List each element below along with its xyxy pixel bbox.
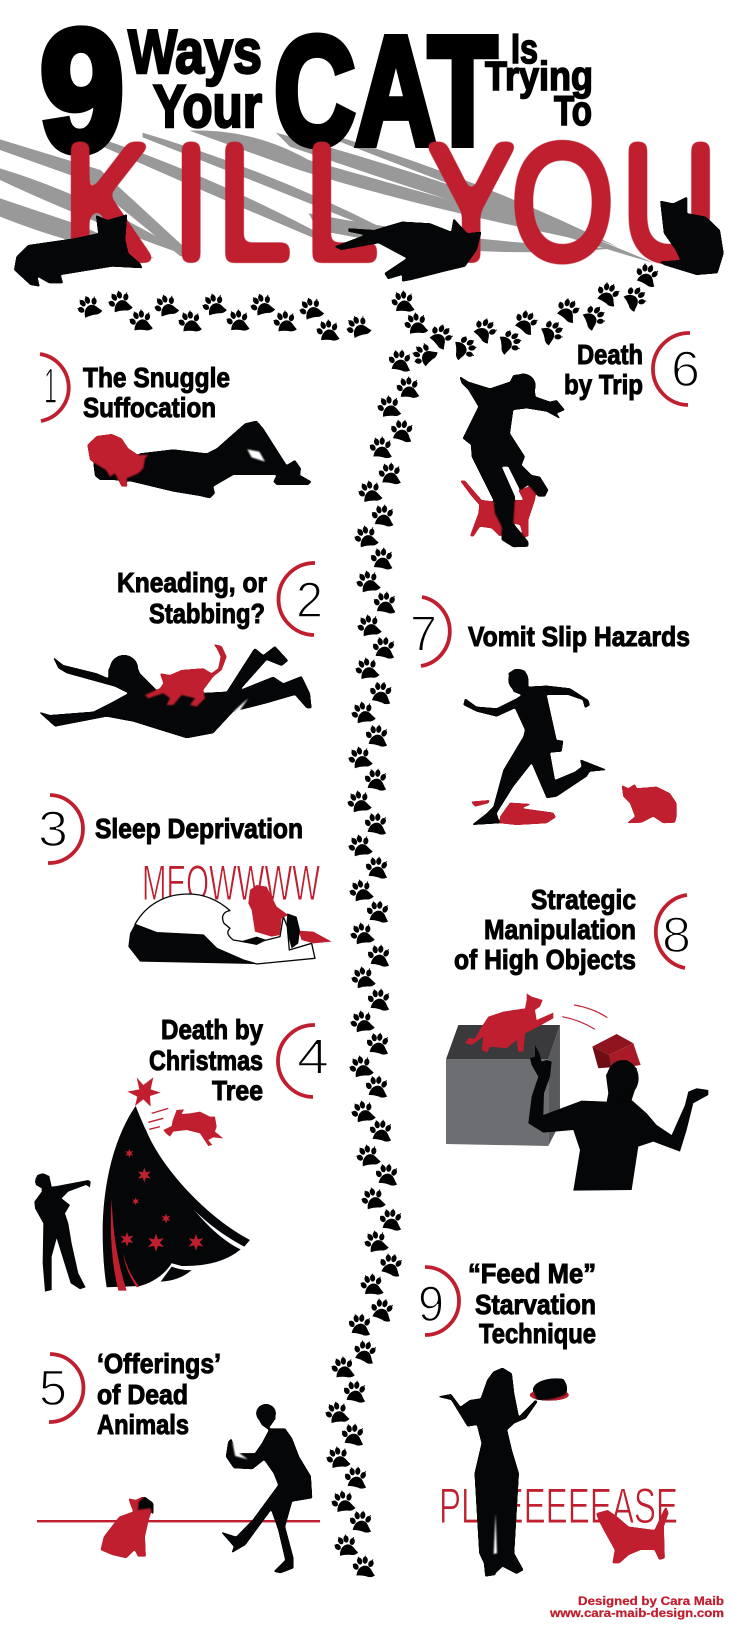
title: 9 Ways Your Cat Is Trying To: Is [511,25,538,72]
meow text: MEOWWWW [142,855,320,911]
number 6: 6 [671,341,700,397]
heading 9: Technique [479,1318,596,1349]
title: 9 Ways Your Cat Is Trying To: Ways [128,18,262,87]
panel 1: The Snuggle Suffocation [40,354,312,498]
title: 9 Ways Your Cat Is Trying To [40,0,593,187]
panel 3: Sleep Deprivation [38,795,332,964]
heading 8: of High Objects [454,944,636,975]
heading 7: Vomit Slip Hazards [468,621,690,652]
heading 4: Christmas [149,1045,263,1076]
heading 1 [83,362,230,423]
heading 5: of Dead [97,1379,188,1410]
heading 3: Sleep Deprivation [95,813,303,844]
illustration: person with cat on face [87,421,312,498]
heading 6: Death [577,339,643,370]
floor line [37,1520,320,1522]
panel 8: Strategic Manipulation of High Objects [446,884,708,1191]
heading 8: Manipulation [484,914,636,945]
panel 4: Death by Christmas Tree [34,1014,329,1292]
illustration: person diving with cat [38,644,312,738]
number 2 [278,563,323,635]
number 3 [38,795,83,863]
number 5 [39,1354,83,1422]
heading 9: “Feed Me” [468,1258,596,1289]
number 3: 3 [38,801,68,857]
title: KILL YOU: KILL YOU [63,110,717,294]
number 4 [278,1025,329,1097]
illustration: falling christmas tree, cat and person [34,1077,250,1292]
title: 9 Ways Your Cat Is Trying To: Your [153,73,262,140]
illustration: person tripping over cat [459,374,565,547]
number 8: 8 [662,907,691,963]
paw trail: left row [73,288,373,344]
title cats [14,197,724,287]
number 9 [418,1267,459,1335]
paw trail: right branch [389,261,661,371]
heading 2: Kneading, or [117,567,267,598]
heading 5: Animals [97,1409,189,1440]
title: 9 Ways Your Cat Is Trying To: 9 [40,0,124,187]
heading 6: by Trip [564,369,643,400]
illustration: grey box, cat, falling cube, person [446,993,708,1191]
panel 9: Feed Me Starvation Technique [418,1258,678,1577]
heading 8 [454,884,636,975]
panel 6: Death by Trip [459,333,700,547]
heading 1: The Snuggle [83,362,230,393]
title: 9 Ways Your Cat Is Trying To: To [554,87,592,134]
heading 9 [468,1258,596,1349]
number 6 [653,333,700,405]
number 2: 2 [296,572,323,628]
heading 8: Strategic [531,884,636,915]
paw trail: main trunk [322,350,420,1579]
background scratches [0,129,654,263]
number 7: 7 [410,606,437,662]
illustration: person slipping on vomit, cat [463,669,677,825]
panel 5: Offerings of Dead Animals [37,1348,320,1573]
heading 9: Starvation [475,1289,596,1320]
panel 2: Kneading, or Stabbing? [38,563,323,738]
number 1 [40,354,69,421]
credits [549,1596,724,1620]
title: 9 Ways Your Cat Is Trying To: Trying [485,53,593,99]
credits: www.cara-maib-design.com [549,1608,724,1620]
heading 1: Suffocation [83,392,216,423]
number 7 [410,597,450,666]
heading 4: Tree [212,1075,263,1106]
heading 2 [117,567,267,629]
title: 9 Ways Your Cat Is Trying To: CAT [274,5,497,177]
number 9: 9 [418,1276,444,1332]
credits: Designed by Cara Maib [578,1596,724,1608]
illustration: cat with dead animal, startled person [101,1404,312,1573]
heading 5: ‘Offerings’ [97,1348,221,1379]
number 1: 1 [44,358,57,414]
number 4: 4 [297,1029,329,1085]
illustration: person in bed with cat [128,885,332,964]
illustration: person holding food, cat [437,1368,669,1577]
heading 4 [149,1014,263,1106]
heading 2: Stabbing? [149,598,265,629]
number 8 [656,895,691,968]
heading 6 [564,339,643,400]
heading 5 [97,1348,221,1440]
number 5: 5 [39,1360,67,1416]
heading 4: Death by [161,1014,263,1045]
panel 7: Vomit Slip Hazards [410,597,690,825]
